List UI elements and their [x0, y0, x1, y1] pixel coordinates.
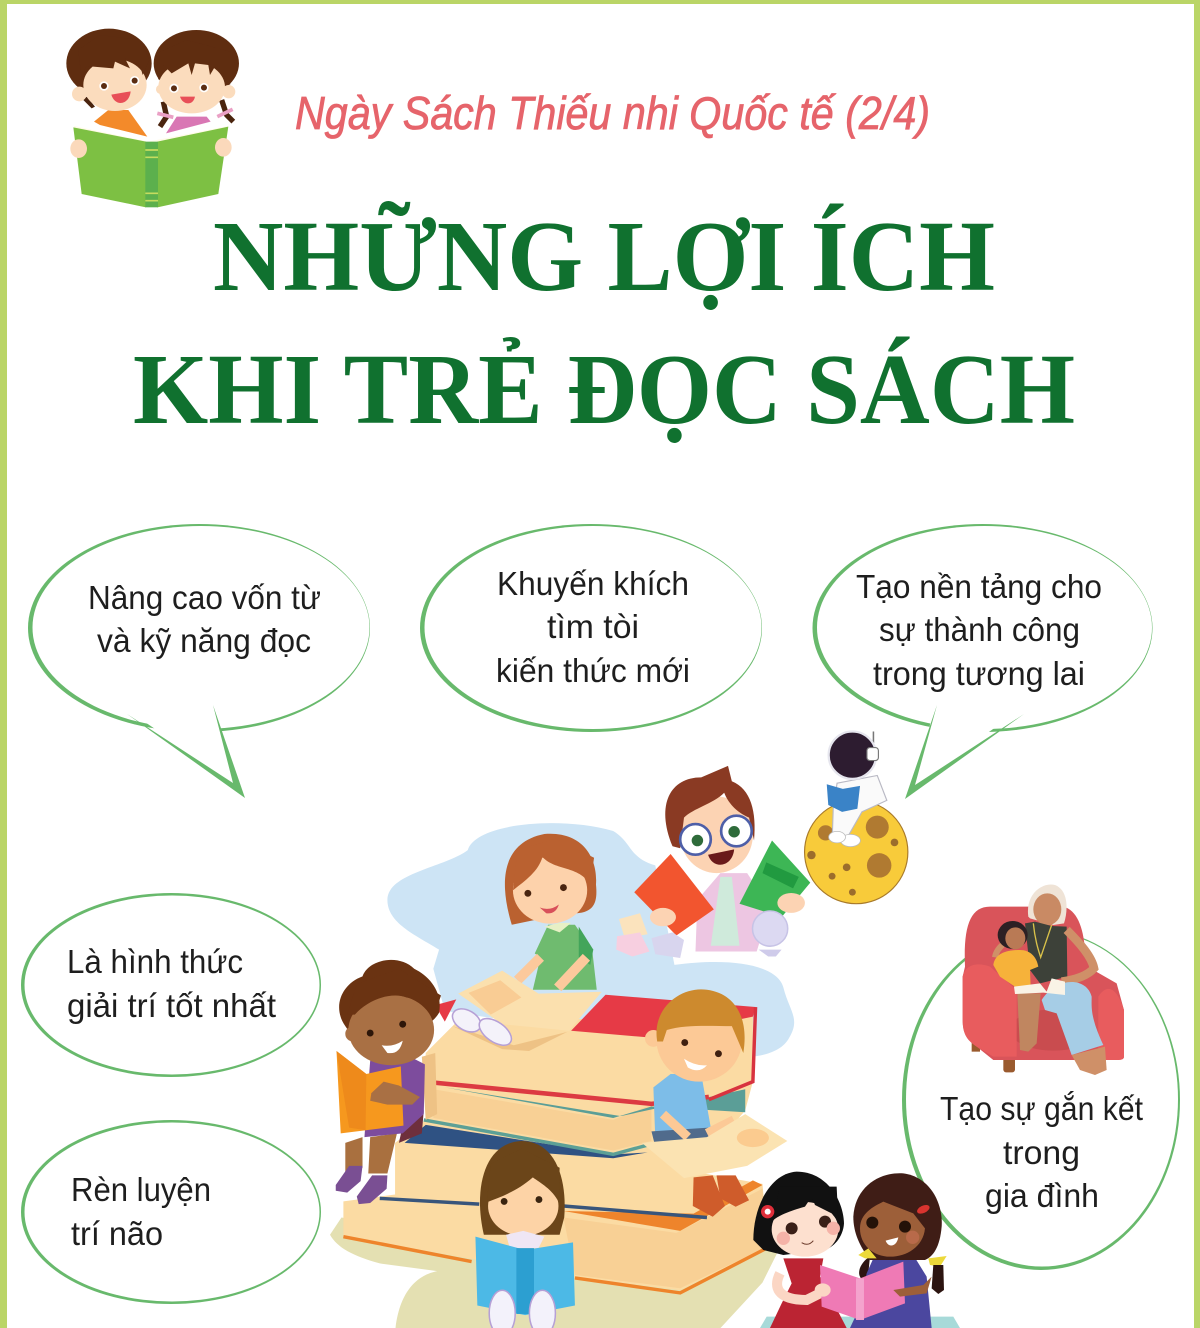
boy with curly hair and orange book: [336, 960, 441, 1204]
speech bubble: family bonding: trong: [1003, 1134, 1080, 1171]
girl reading a blue book: [475, 1141, 575, 1328]
stack of books: [343, 995, 768, 1293]
speech bubble: new knowledge: tìm tòi: [547, 608, 639, 645]
speech bubble: brain training: Rèn luyện: [71, 1171, 211, 1208]
speech bubble: family bonding: [902, 930, 1180, 1270]
speech bubble: family bonding: gia đình: [985, 1177, 1099, 1214]
illustration: grandmother and child in an armchair: [963, 884, 1124, 1075]
girl in green dress: [448, 834, 602, 1051]
teacher with glasses holding books: [616, 766, 810, 958]
astronaut on a yellow moon: [805, 731, 908, 904]
title: KHI TRẺ ĐỌC SÁCH: [133, 333, 1075, 445]
title: [133, 199, 1075, 445]
blond boy with open book: [642, 989, 787, 1217]
speech bubble: future success: [812, 524, 1152, 799]
illustration: two girls reading a pink book: [753, 1172, 960, 1328]
speech bubble: new knowledge: kiến thức mới: [496, 652, 690, 689]
speech bubble: family bonding: Tạo sự gắn kết: [940, 1090, 1143, 1127]
subtitle: Ngày Sách Thiếu nhi Quốc tế (2/4): [295, 87, 930, 139]
speech bubble: vocabulary: Nâng cao vốn từ: [88, 579, 321, 616]
speech bubble: future success: Tạo nền tảng cho: [856, 568, 1102, 605]
speech bubble: vocabulary: [28, 524, 370, 798]
illustration: children on a stack of books: [330, 731, 908, 1328]
speech bubble: vocabulary: và kỹ năng đọc: [97, 622, 311, 659]
ground: [330, 1218, 782, 1328]
speech bubble: future success: sự thành công: [879, 611, 1080, 648]
speech bubble: entertainment: giải trí tốt nhất: [67, 987, 276, 1024]
icon: two children reading a green book: [66, 29, 239, 207]
speech bubble: future success: trong tương lai: [873, 655, 1085, 692]
title: NHỮNG LỢI ÍCH: [213, 199, 995, 312]
blue cloud background: [387, 823, 794, 1057]
speech bubble: new knowledge: Khuyến khích: [497, 565, 689, 602]
speech bubble: brain training: trí não: [71, 1215, 163, 1252]
speech bubble: entertainment: [21, 893, 321, 1077]
speech bubble: entertainment: Là hình thức: [67, 943, 243, 980]
speech bubble: new knowledge: [420, 524, 762, 732]
speech bubble: brain training: [21, 1120, 321, 1304]
